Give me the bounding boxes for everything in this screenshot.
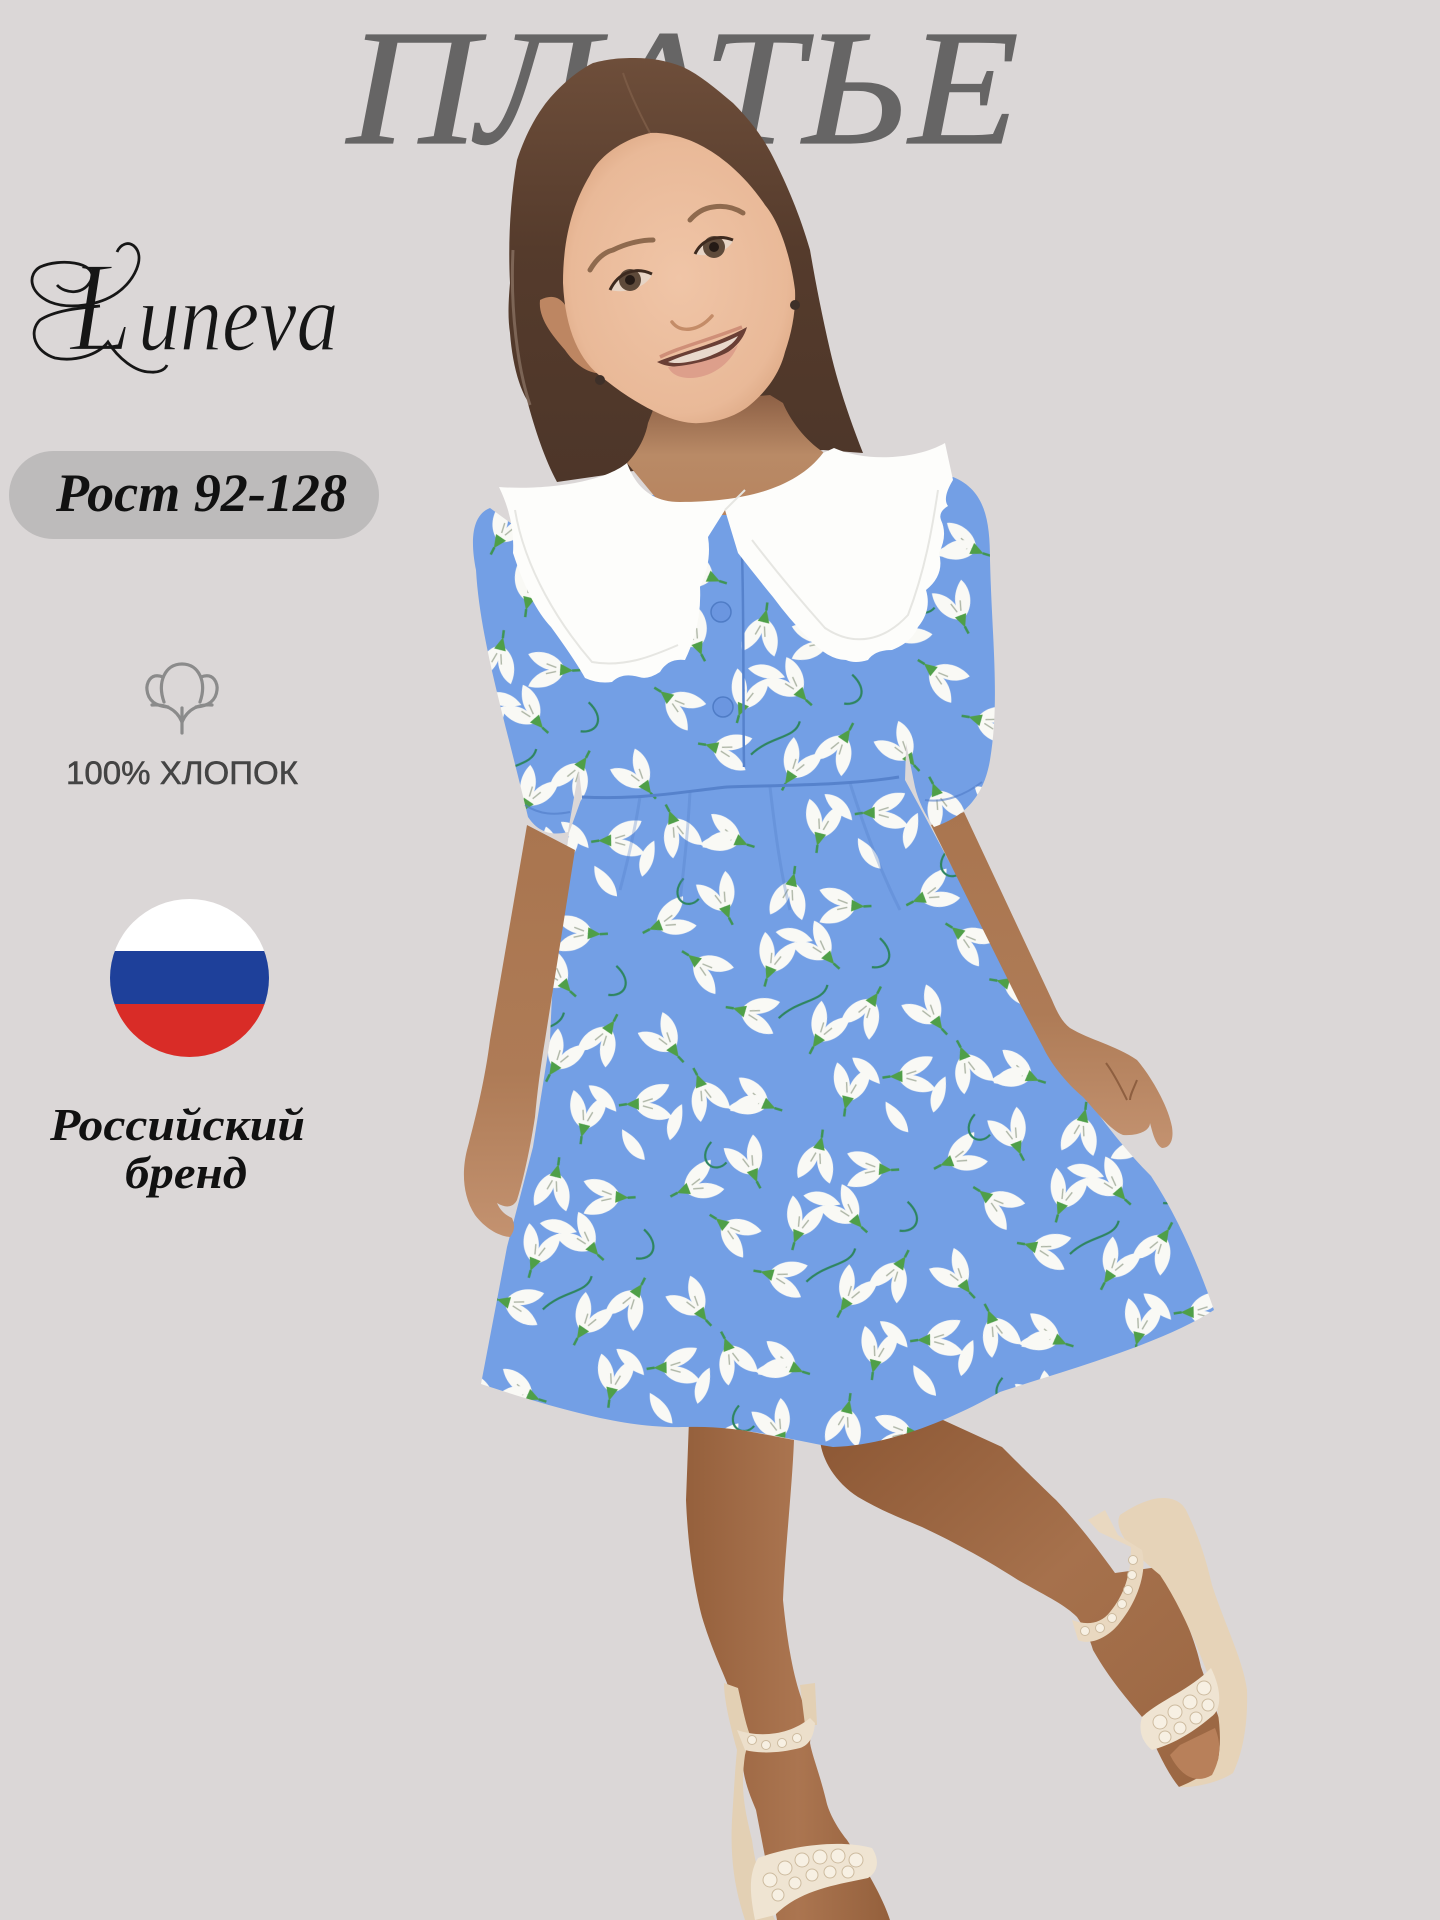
right leg — [820, 1420, 1222, 1787]
right arm — [931, 812, 1173, 1148]
icon: cotton boll — [147, 664, 217, 733]
finger creases — [1106, 1063, 1137, 1100]
peter pan collar — [499, 443, 953, 682]
placket — [742, 553, 744, 767]
girl in dress — [464, 58, 1247, 1920]
brand logo: Luneva: uneva — [138, 264, 339, 371]
dress skirt and bodice — [481, 470, 1214, 1447]
nose — [672, 316, 712, 329]
cotton text: 100% ХЛОПОК — [66, 755, 298, 791]
earrings — [595, 300, 800, 385]
russian brand caption: бренд — [125, 1147, 247, 1198]
right sleeve — [885, 477, 995, 827]
left sleeve — [473, 508, 590, 833]
collar ruffle lines — [515, 490, 938, 664]
brand logo: Luneva — [32, 236, 339, 379]
buttons — [711, 602, 733, 717]
icon: russian flag — [110, 899, 269, 1057]
eyes and brows — [590, 206, 743, 291]
skirt gathers — [620, 783, 900, 910]
cotton label — [66, 664, 298, 791]
hair part — [623, 73, 650, 133]
left arm — [464, 825, 575, 1237]
brand logo: Luneva: L — [68, 236, 132, 379]
hair highlight — [512, 250, 530, 405]
neck — [627, 395, 830, 515]
title: ПЛАТЬЕ — [345, 0, 1019, 179]
right toes — [1170, 1728, 1219, 1779]
left sandal — [724, 1683, 877, 1920]
ear — [540, 297, 603, 373]
height badge: Рост 92-128 — [55, 463, 347, 523]
face — [563, 133, 795, 423]
russian brand caption: Российский — [49, 1099, 305, 1150]
sleeve cuffs — [525, 782, 982, 814]
right sandal — [1072, 1498, 1247, 1787]
hair — [508, 58, 863, 482]
waist seam — [582, 777, 899, 798]
left leg — [686, 1420, 890, 1920]
height badge — [9, 451, 379, 539]
russian brand caption — [49, 1099, 305, 1198]
smile — [657, 327, 747, 378]
